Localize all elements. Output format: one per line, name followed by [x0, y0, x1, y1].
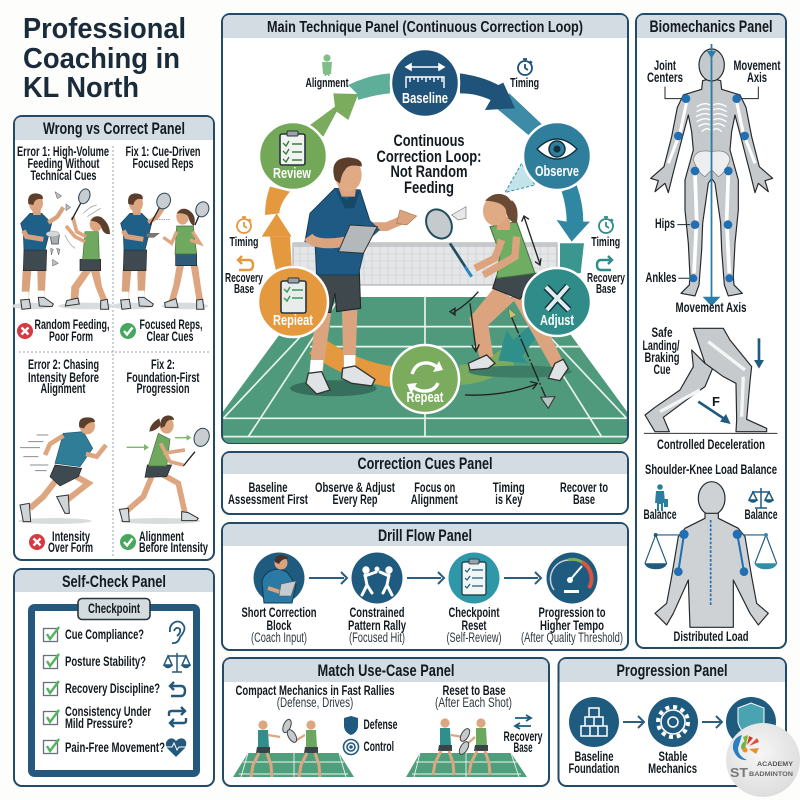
- node: review: [259, 122, 327, 190]
- arrow: [309, 572, 347, 584]
- label: stable mechanics: Stable: [658, 749, 688, 764]
- logo text: BADMINTON: [749, 771, 793, 778]
- icon and label: timing top: Timing: [510, 76, 539, 90]
- icon: control target: [344, 740, 358, 754]
- figures: coach cueing and player: [112, 191, 211, 309]
- step: short correction block: Short Correction: [242, 605, 316, 620]
- icon: coach with tablet: [254, 552, 304, 604]
- label: distributed load: Distributed Load: [674, 629, 748, 644]
- step: checkpoint reset: Checkpoint: [448, 605, 500, 620]
- icon: balance person: [655, 484, 668, 511]
- fix 1 text: Fix 1: Cue-Driven: [126, 144, 200, 159]
- observation cone: [505, 164, 535, 192]
- panel: drill flow: [222, 523, 628, 650]
- arrow: adjust to repeat: [460, 327, 538, 375]
- checklist items: Recovery Discipline?: [65, 681, 160, 696]
- panel: wrong vs correct: [12, 116, 214, 560]
- fix 1 text: Focused Reps: [132, 156, 194, 171]
- label: compact mechanics: (Defense, Drives): [277, 695, 353, 710]
- error 2 text: Alignment: [40, 381, 86, 396]
- arrow: observe to adjust: [557, 185, 590, 273]
- cue: alignment: Alignment: [411, 492, 458, 507]
- icon: red x: [29, 534, 45, 550]
- node: observe: [523, 122, 591, 190]
- figure: balanced player with racket: [119, 415, 212, 524]
- arrow: review to baseline: [310, 73, 390, 137]
- label: compact mechanics: [236, 683, 394, 710]
- center text: Feeding: [404, 179, 454, 197]
- label: joint centers: Centers: [647, 70, 683, 85]
- center text: Correction Loop:: [376, 148, 482, 166]
- panel: match use-case: [223, 658, 549, 786]
- label: joint centers: [647, 58, 683, 85]
- icon and label: timing and recovery right: Timing: [591, 235, 620, 249]
- label: focused reps: [140, 317, 202, 344]
- continuous loop arrows: [262, 73, 590, 377]
- icon and label: timing and recovery right: Base: [596, 282, 616, 296]
- cue: recover: Base: [573, 492, 595, 507]
- title: Professional: [23, 13, 186, 45]
- step: constrained pattern rally: [348, 605, 406, 645]
- step: progression to higher tempo: Higher Tempo: [540, 618, 604, 633]
- label: ankles: Ankles: [646, 270, 676, 285]
- heading: self-check: Self-Check Panel: [62, 572, 166, 591]
- cue: observe: Every Rep: [332, 492, 378, 507]
- center text: Not Random: [390, 163, 468, 181]
- cue: observe: Observe & Adjust: [315, 480, 395, 495]
- fix 1 text: [126, 144, 200, 171]
- icon: green check: [120, 534, 136, 550]
- label: compact mechanics: Compact Mechanics in Fast Rallies: [236, 683, 394, 698]
- label: movement axis top: Movement: [734, 58, 781, 73]
- net: [293, 243, 557, 285]
- checkpoint tab: Checkpoint: [88, 601, 140, 616]
- label: random feeding: Random Feeding,: [34, 317, 110, 332]
- icon: two players rally: [352, 552, 402, 604]
- icon and label: timing and recovery left: Recovery: [225, 271, 263, 285]
- step: checkpoint reset: (Self-Review): [446, 630, 502, 645]
- node: adjust: Adjust: [540, 313, 574, 329]
- error 2 text: [28, 357, 99, 396]
- fix 2 text: [126, 357, 200, 396]
- label: hips: Hips: [655, 216, 675, 231]
- logo watermark: [726, 723, 800, 797]
- label: baseline foundation: Baseline: [574, 749, 614, 764]
- icon: gear: [648, 697, 698, 747]
- node: review: Review: [273, 166, 312, 182]
- label: safe landing: [642, 325, 680, 377]
- panel: main technique: [222, 14, 628, 443]
- step: short correction block: [242, 605, 316, 645]
- center text: Continuous: [394, 132, 464, 150]
- icon and label: alignment: Alignment: [306, 76, 349, 90]
- label: reset to base: Reset to Base: [442, 683, 506, 698]
- label: movement axis bottom: Movement Axis: [676, 300, 746, 315]
- checklist items: Posture Stability?: [65, 654, 146, 669]
- step: progression to higher tempo: (After Quality Threshold): [521, 630, 623, 645]
- movement axis arrow: [703, 44, 720, 306]
- checklist items: Mild Pressure?: [65, 716, 133, 731]
- label: baseline foundation: [568, 749, 620, 776]
- icon and label: timing and recovery left: Base: [234, 282, 254, 296]
- panel: progression: [558, 658, 786, 786]
- error 2 text: Intensity Before: [28, 370, 99, 385]
- fix 2 text: Foundation-First: [126, 370, 200, 385]
- icon: red x: [17, 323, 33, 339]
- checklist items: Consistency Under: [65, 704, 152, 719]
- label: stable mechanics: [648, 749, 697, 776]
- icon and label: timing and recovery right: Recovery: [587, 271, 625, 285]
- node: repieat: Repieat: [273, 313, 313, 329]
- icon and label: recovery base: Base: [514, 740, 533, 755]
- label: reset to base: (After Each Shot): [435, 695, 512, 710]
- label: reset to base: [435, 683, 512, 710]
- title: [23, 13, 186, 104]
- icon: foundation blocks: [569, 697, 619, 747]
- cue: baseline: [228, 480, 308, 507]
- label: alignment before intensity: [139, 529, 208, 555]
- arrow: [407, 572, 444, 584]
- title: Coaching in: [23, 43, 180, 75]
- node: repieat: [258, 267, 328, 337]
- cue: baseline: Baseline: [248, 480, 288, 495]
- cue: timing: Timing: [493, 480, 525, 495]
- logo text: [730, 761, 794, 780]
- error 1 text: Error 1: High-Volume: [17, 144, 109, 159]
- icon and label: recovery base: Recovery: [504, 729, 543, 744]
- label: balance right: Balance: [744, 507, 778, 522]
- logo text: ST: [730, 765, 748, 780]
- icon: green check: [120, 323, 136, 339]
- label: safe landing: Landing/: [642, 338, 680, 353]
- heading: main technique: Main Technique Panel (Continuous Correction Loop): [267, 19, 583, 36]
- icon: return arrow: [170, 682, 185, 696]
- label: focused reps: Focused Reps,: [140, 317, 202, 332]
- cue: timing: is Key: [495, 492, 523, 507]
- heading: drill flow: Drill Flow Panel: [378, 526, 472, 545]
- label: intensity over form: Over Form: [48, 540, 93, 555]
- icon: defense shield: [344, 716, 358, 735]
- error 1 text: Technical Cues: [30, 168, 96, 183]
- label: safe landing: Braking: [644, 350, 680, 365]
- step: progression to higher tempo: [521, 605, 623, 645]
- label: safe landing: Cue: [654, 362, 671, 377]
- label: alignment before intensity: Before Intensity: [139, 540, 208, 555]
- heading: progression: Progression Panel: [616, 661, 728, 680]
- icon and label: timing top: [510, 59, 539, 90]
- panel: correction cues: [222, 452, 628, 514]
- icon and label: recovery base: [504, 715, 543, 755]
- error 1 text: [17, 144, 109, 183]
- logo text: ACADEMY: [757, 761, 794, 768]
- node: observe: Observe: [535, 164, 579, 180]
- node: baseline: [391, 49, 459, 117]
- heading: correction cues: Correction Cues Panel: [358, 454, 492, 473]
- label: movement axis top: [734, 58, 781, 85]
- arrow: [702, 716, 722, 728]
- panel: self-check: [14, 569, 214, 786]
- figure: running player: [18, 417, 106, 524]
- step: constrained pattern rally: (Focused Hit): [349, 630, 405, 645]
- error 2 text: Error 2: Chasing: [28, 357, 99, 372]
- label: alignment before intensity: Alignment: [139, 529, 184, 544]
- step: short correction block: Block: [266, 618, 292, 633]
- heading: wrong vs correct: Wrong vs Correct Panel: [43, 119, 185, 138]
- step: constrained pattern rally: Pattern Rally: [348, 618, 406, 633]
- arrow: baseline to observe: [460, 73, 543, 135]
- label: safe landing: Safe: [652, 325, 673, 340]
- checklist items: Cue Compliance?: [65, 627, 144, 642]
- fix 2 text: Fix 2:: [151, 357, 175, 372]
- label: focused reps: Clear Cues: [146, 329, 194, 344]
- label: baseline foundation: Foundation: [568, 761, 620, 776]
- arrow: repeat to review orange: [262, 187, 392, 377]
- cue: alignment: Focus on: [414, 480, 455, 495]
- icon and label: timing and recovery left: [225, 217, 263, 296]
- icon: balance scale: [749, 488, 773, 508]
- cue: recover: Recover to: [560, 480, 608, 495]
- label: joint centers: Joint: [654, 58, 676, 73]
- icon and label: alignment: [306, 54, 349, 90]
- icon and label: timing and recovery right: [587, 217, 625, 296]
- court: [222, 297, 628, 443]
- coach figure: [290, 157, 417, 396]
- node: repeat: Repeat: [406, 390, 444, 406]
- icon: ear: [170, 622, 184, 643]
- checkpoint frame: [32, 608, 196, 774]
- node: baseline: Baseline: [402, 91, 448, 107]
- label: stable mechanics: Mechanics: [648, 761, 697, 776]
- icon: checkpoint clipboard: [448, 552, 500, 604]
- icon and label: timing and recovery left: Timing: [230, 235, 258, 249]
- step: checkpoint reset: Reset: [462, 618, 487, 633]
- heading: match use-case: Match Use-Case Panel: [318, 661, 454, 680]
- checklist items: [65, 627, 165, 755]
- icon: scale: [164, 653, 190, 672]
- node: repeat: [391, 345, 459, 413]
- step: constrained pattern rally: Constrained: [350, 605, 404, 620]
- cue: observe: [315, 480, 395, 507]
- cue: alignment: [411, 480, 458, 507]
- step: progression to higher tempo: Progression to: [538, 605, 606, 620]
- figure: landing legs: [644, 328, 777, 433]
- checkboxes: [44, 627, 59, 754]
- cue: baseline: Assessment First: [228, 492, 308, 507]
- node: adjust: [523, 268, 591, 336]
- icon: shield: [726, 697, 776, 747]
- label: force: F: [712, 394, 720, 409]
- icon: repeat arrows: [169, 707, 186, 727]
- figures: coach feeding and player reaching: [12, 187, 115, 309]
- arrow: [504, 572, 541, 584]
- error 1 text: Feeding Without: [28, 156, 100, 171]
- logo mark: [733, 735, 759, 760]
- title: KL North: [23, 72, 139, 104]
- label: intensity over form: Intensity: [52, 529, 90, 544]
- step: checkpoint reset: [446, 605, 502, 645]
- arrow: [623, 716, 644, 728]
- label: balance left: Balance: [644, 507, 677, 522]
- label: control: Control: [364, 739, 394, 754]
- player figure: [421, 194, 572, 408]
- label: movement axis top: Axis: [747, 70, 767, 85]
- step: short correction block: (Coach Input): [251, 630, 307, 645]
- fix 2 text: Progression: [136, 381, 190, 396]
- panel: biomechanics: [636, 14, 786, 648]
- cue: recover: [560, 480, 608, 507]
- checkpoint tab: [78, 598, 150, 620]
- icon: heart pulse: [166, 738, 186, 757]
- label: random feeding: [34, 317, 110, 344]
- cue: timing: [493, 480, 525, 507]
- label: defense: Defense: [364, 717, 398, 732]
- label: random feeding: Poor Form: [49, 329, 93, 344]
- figure: load balance torso: [644, 482, 777, 627]
- center text: [376, 132, 482, 197]
- skeleton figure with joints: [651, 49, 773, 296]
- mini court and rally left: [233, 718, 354, 777]
- label: intensity over form: [48, 529, 93, 555]
- mini court and rally right: [406, 718, 527, 777]
- icon: tempo gauge: [546, 552, 598, 604]
- checklist items: Pain-Free Movement?: [65, 740, 165, 755]
